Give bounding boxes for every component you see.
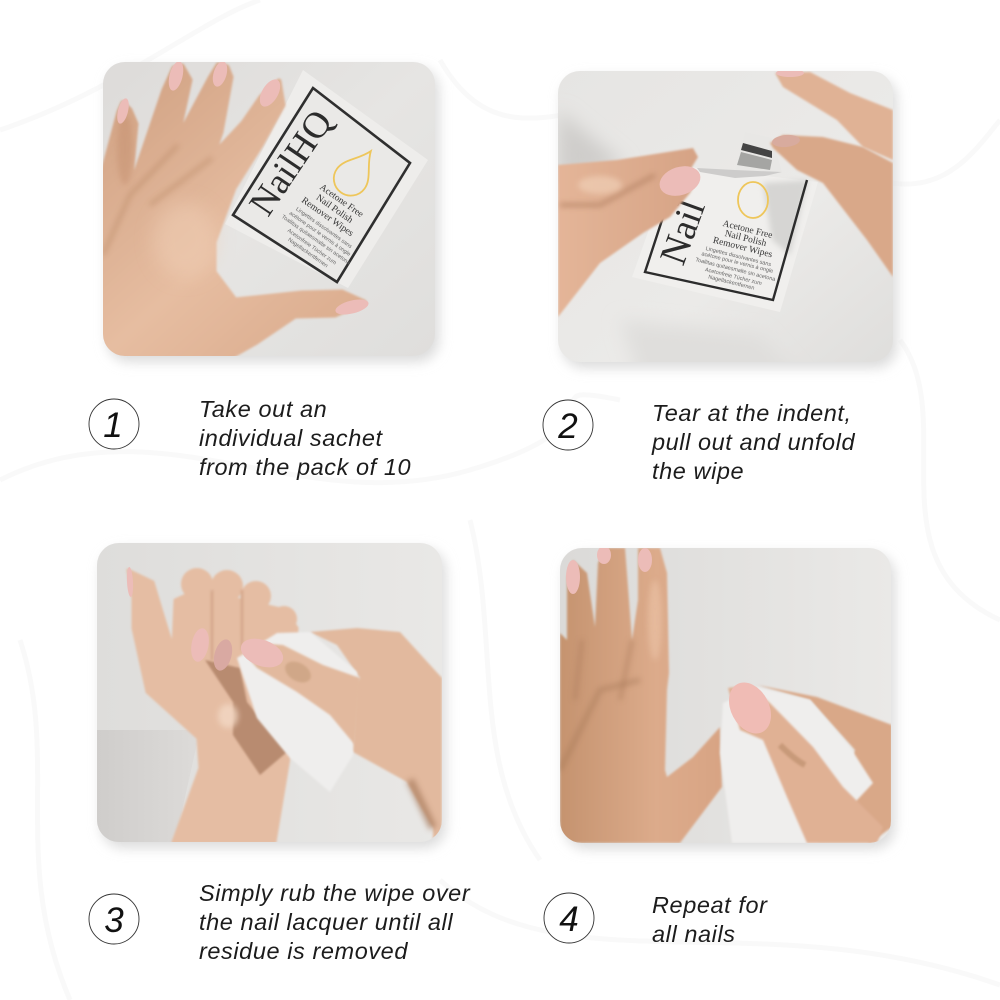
step 1 text: from the pack of 10 xyxy=(199,454,411,480)
step 1 text: individual sachet xyxy=(199,425,383,451)
right hand back xyxy=(310,628,442,840)
panel: step 3 photo xyxy=(97,543,446,848)
step 1 number xyxy=(89,399,139,449)
right hand xyxy=(770,69,893,277)
sachet: Nagellackentfernen xyxy=(286,237,329,269)
step 4 text: all nails xyxy=(652,921,736,947)
sachet: Lingettes dissolvantes sans xyxy=(294,206,353,250)
sachet: acétone pour le vernis à ongle xyxy=(701,251,774,275)
step 2 number xyxy=(543,400,593,450)
sachet: acétone pour le vernis à ongle xyxy=(288,211,351,258)
panel: step 2 photo xyxy=(558,69,897,380)
sachet: Acetone Free xyxy=(722,219,773,241)
step 4 number xyxy=(544,893,594,943)
step 3 text: the nail lacquer until all xyxy=(199,909,453,935)
thumb xyxy=(721,675,883,843)
sachet: Acetonfreie Tücher zum xyxy=(286,228,338,267)
step 3 number xyxy=(89,894,139,944)
left hand xyxy=(560,546,722,843)
step 2 number: 2 xyxy=(557,407,578,446)
sachet: Remover Wipes xyxy=(712,236,774,260)
sachet: Toallitas quitaesmalte sin acetona xyxy=(695,257,777,283)
finger shading xyxy=(103,145,212,255)
wipe xyxy=(720,687,873,843)
step 3 text: Simply rub the wipe over xyxy=(199,880,471,906)
sachet: Nagellackentfernen xyxy=(708,274,755,292)
panel: step 1 photo xyxy=(103,60,439,362)
right hand back xyxy=(757,685,892,843)
step 4 text: Repeat for xyxy=(652,892,768,918)
left hand xyxy=(126,567,297,842)
sachet: Acetonfreie Tücher zum xyxy=(704,267,763,287)
wipe xyxy=(237,632,357,792)
step 2 text: the wipe xyxy=(652,458,744,484)
sachet: Nail Polish xyxy=(314,193,355,226)
hand xyxy=(103,60,370,356)
panel: step 4 photo xyxy=(560,546,895,849)
step 2 text: pull out and unfold xyxy=(651,429,855,455)
step 1 text: Take out an xyxy=(199,396,327,422)
step 3 text: residue is removed xyxy=(199,938,408,964)
sachet: NailHQ xyxy=(241,103,341,223)
step 3 number: 3 xyxy=(104,901,124,940)
step 2 text: Tear at the indent, xyxy=(652,400,852,426)
step 4 number: 4 xyxy=(559,900,579,939)
sachet xyxy=(225,70,428,288)
sachet: Remover Wipes xyxy=(299,196,355,239)
right index finger xyxy=(237,633,433,828)
step 1 number: 1 xyxy=(103,406,123,445)
left hand xyxy=(558,148,704,317)
sachet: Lingettes dissolvantes sans xyxy=(705,246,772,268)
sachet: Nail Polish xyxy=(724,229,768,249)
sachet xyxy=(644,143,808,312)
sachet: Acetone Free xyxy=(317,183,365,220)
sachet: Nail xyxy=(652,194,714,270)
sachet: Toallitas quitaesmalte sin acetona xyxy=(280,214,352,267)
